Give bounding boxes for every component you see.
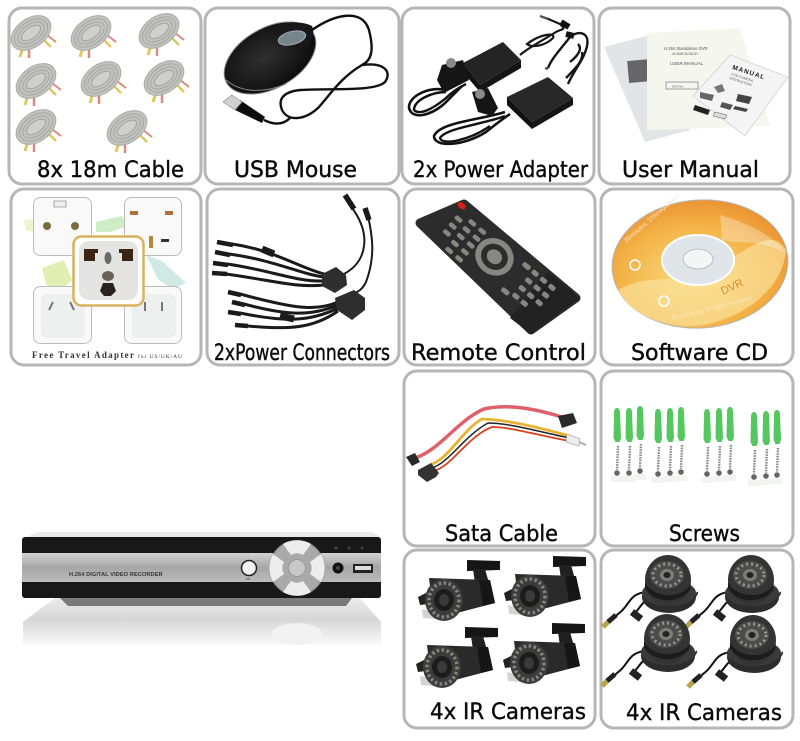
panel: USB mouse xyxy=(205,7,399,184)
icon: disc: Do not copy, all rights reserved xyxy=(671,296,752,322)
panel: software CD xyxy=(601,189,793,366)
label: Software CD xyxy=(631,341,768,366)
model text: H.264 DIGITAL VIDEO RECORDER xyxy=(69,572,163,578)
icon: stack of manuals: CCD CAMERA xyxy=(731,72,754,83)
illustration: green world map xyxy=(24,216,186,294)
remote buttons xyxy=(430,201,560,320)
panel: remote control xyxy=(404,189,595,366)
icon: four bullet cameras xyxy=(416,556,586,688)
label: 2xPower Connectors xyxy=(214,341,390,366)
label: 8x 18m Cable xyxy=(37,158,184,183)
USB port xyxy=(353,564,373,573)
panel: 2x power connectors xyxy=(207,189,399,366)
caption: Free Travel Adapter xyxy=(32,350,134,360)
icon: stack of manuals xyxy=(604,28,788,142)
panel: 2x power adapter xyxy=(402,8,594,184)
icon: universal adapter xyxy=(74,236,144,306)
icon: stack of manuals: 4CH/8CH/16CH xyxy=(672,52,698,56)
icon: AU socket xyxy=(34,286,92,344)
label: USB Mouse xyxy=(234,158,357,183)
panel: user manual xyxy=(599,8,790,184)
icon: stack of manuals: USER MANUAL xyxy=(670,61,704,66)
FN button: FN xyxy=(246,577,250,581)
icon: SATA cables xyxy=(406,407,586,482)
panel: screws xyxy=(601,371,793,547)
icon: EU socket xyxy=(34,198,92,256)
panel: dome cameras xyxy=(601,550,793,728)
directional pad xyxy=(269,540,325,596)
icon: stack of manuals: INSTRUCTION xyxy=(729,76,752,87)
label: Screws xyxy=(669,522,740,547)
status LEDs and jack xyxy=(332,546,364,574)
label: User Manual xyxy=(622,158,759,183)
panel: free travel adapter xyxy=(11,189,201,365)
panel: 8x 18m cable xyxy=(5,7,201,184)
icon: stack of manuals: DIGITAL xyxy=(672,84,684,88)
icon: US socket xyxy=(124,286,182,344)
label: Remote Control xyxy=(411,341,586,366)
icon: UK socket xyxy=(124,198,182,256)
icon: disc: DVR xyxy=(719,277,745,298)
label: Sata Cable xyxy=(445,522,558,547)
icon: eight cable coils xyxy=(5,7,190,153)
reflection xyxy=(23,598,381,645)
icon: stack of manuals: MANUAL xyxy=(731,64,766,81)
label: 4x IR Cameras xyxy=(430,700,586,725)
icon: black mouse with cable xyxy=(212,7,388,123)
caption: for US/UK/AU xyxy=(138,353,182,360)
icon: four dome cameras xyxy=(602,555,782,687)
icon: disc: 25minutes, 225megabytes xyxy=(623,194,680,245)
icon: disc xyxy=(608,194,792,334)
DVR recorder xyxy=(22,532,381,645)
icon: stack of manuals: H.264 Standalone DVR xyxy=(664,46,708,51)
panel: SATA cable xyxy=(404,371,595,547)
FN button xyxy=(242,560,256,581)
icon: remote control xyxy=(420,201,580,334)
icon: wall plugs and screws xyxy=(611,406,783,486)
label: 2x Power Adapter xyxy=(413,158,589,183)
icon: Y splitter cables xyxy=(212,195,372,328)
panel: bullet cameras xyxy=(404,550,595,728)
splitter hubs xyxy=(322,267,365,320)
label: 4x IR Cameras xyxy=(626,701,782,726)
icon: two power adapters xyxy=(409,16,587,144)
